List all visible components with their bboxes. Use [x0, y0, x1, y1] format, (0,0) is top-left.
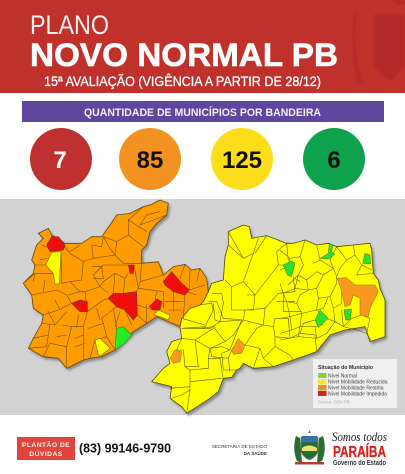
header banner: [0, 0, 405, 93]
flag counters: [30, 128, 365, 190]
legend: [313, 359, 397, 408]
eastern flags: orange municipalities: [170, 278, 378, 363]
map panel: [0, 199, 405, 416]
government logo lettering: Somos todos: [332, 429, 387, 444]
counter: green 6: [303, 128, 365, 190]
subtitle: evaluation: 15ª AVALIAÇÃO (VIGÊNCIA A PARTIR DE 28/12): [44, 73, 321, 89]
legend item: reduced: Nível Mobilidade Reduzida: [328, 380, 388, 386]
hotline phone number: (83) 99146-9790: [79, 442, 171, 456]
hotline badge: [17, 437, 75, 460]
counter: red 7: [30, 128, 92, 190]
western flag: green municipality: [115, 327, 132, 350]
health secretariat credit: [212, 444, 267, 456]
footer: [17, 429, 387, 467]
health secretariat credit: DA SAÚDE: [244, 450, 267, 456]
map of municipalities: [23, 200, 387, 416]
eastern flags: green municipalities: [283, 243, 371, 327]
southern lobe municipal boundaries: [170, 293, 242, 413]
counter: red 7: 7: [53, 147, 67, 174]
counter: green 6: 6: [327, 147, 341, 174]
government logo lettering: Governo do Estado: [333, 460, 386, 467]
NE municipal boundaries: [280, 240, 373, 342]
legend item: normal: Nível Normal: [328, 374, 357, 380]
counter: orange 85: 85: [137, 147, 163, 174]
legend item: restricted: Nível Mobilidade Restrita: [328, 386, 384, 392]
title: NOVO NORMAL PB: NOVO NORMAL PB: [30, 37, 338, 73]
icon: state crest watermark: [352, 0, 405, 84]
counter: yellow 125: [211, 128, 273, 190]
hotline badge: PLANTÃO DE: [22, 440, 70, 449]
icon: Paraíba coat of arms: [294, 430, 325, 464]
legend: Situação do Município: [318, 365, 373, 371]
health secretariat credit: SECRETARIA DE ESTADO: [212, 444, 267, 449]
section heading bar: QUANTIDADE DE MUNICÍPIOS POR BANDEIRA: [84, 106, 321, 119]
map shadow: [25, 203, 387, 416]
counter: yellow 125: 125: [222, 147, 262, 174]
western flags: yellow municipalities: [46, 252, 170, 355]
counter: orange 85: [119, 128, 181, 190]
government logo lettering: PARAÍBA: [333, 444, 386, 461]
legend source: Source: GOV PB: [318, 400, 350, 404]
section heading bar: [22, 101, 384, 122]
western region: orange municipalities: [23, 200, 208, 368]
legend item: blocked: Nível Mobilidade Impedida: [328, 392, 387, 398]
western flags: red municipalities: [47, 237, 189, 320]
title: PLANO: PLANO: [30, 10, 109, 40]
government logo lettering: [332, 429, 387, 467]
hotline badge: DÚVIDAS: [29, 449, 63, 458]
eastern region: yellow municipalities: [152, 225, 385, 413]
